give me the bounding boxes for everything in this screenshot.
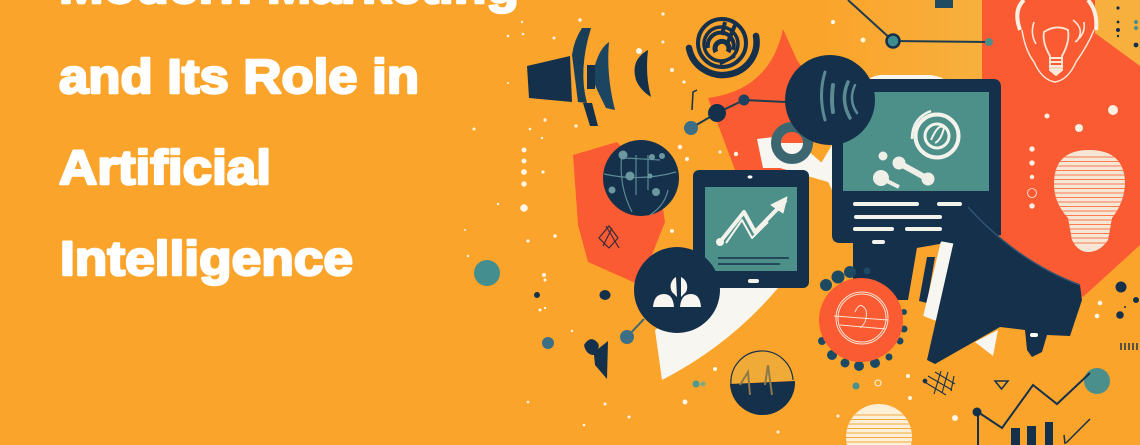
- network nodes: [684, 90, 786, 135]
- half globe: [730, 351, 795, 415]
- monitor screen: [843, 92, 989, 191]
- right side small marks: [1116, 6, 1138, 350]
- line chart icon: [972, 368, 1110, 445]
- title: Artificial: [59, 142, 271, 195]
- globe icon: [603, 140, 679, 216]
- title: Intelligence: [60, 233, 353, 286]
- left scatter shapes: [474, 260, 1139, 390]
- red background shapes: [573, 0, 1140, 297]
- hatch icon: [923, 371, 955, 395]
- monitor: [832, 79, 1001, 300]
- text lines: [853, 202, 962, 244]
- dots around bulb: [1028, 105, 1118, 209]
- confetti dots: [464, 12, 1102, 434]
- crossed diamond icon: [599, 226, 619, 248]
- light bulb outline: [1017, 0, 1096, 82]
- network glyph: [874, 152, 934, 187]
- spiral icon: [689, 19, 757, 75]
- white background patches: [655, 75, 945, 380]
- title: [59, 0, 519, 286]
- left megaphone icon: [527, 28, 651, 126]
- striped light bulb: [1054, 150, 1125, 252]
- tablet: [693, 170, 809, 288]
- large megaphone: [908, 207, 1082, 364]
- circular people icon: [620, 247, 720, 344]
- spiral at-sign icon: [912, 111, 958, 158]
- gear icon: [818, 266, 908, 371]
- trend arrow: [716, 197, 787, 246]
- donut chart icon: [776, 127, 808, 159]
- speaker circle: [785, 55, 875, 145]
- striped circle: [846, 404, 912, 445]
- tablet screen: [705, 187, 797, 271]
- connector lines top right: [831, 0, 993, 48]
- title: and Its Role in: [59, 51, 419, 104]
